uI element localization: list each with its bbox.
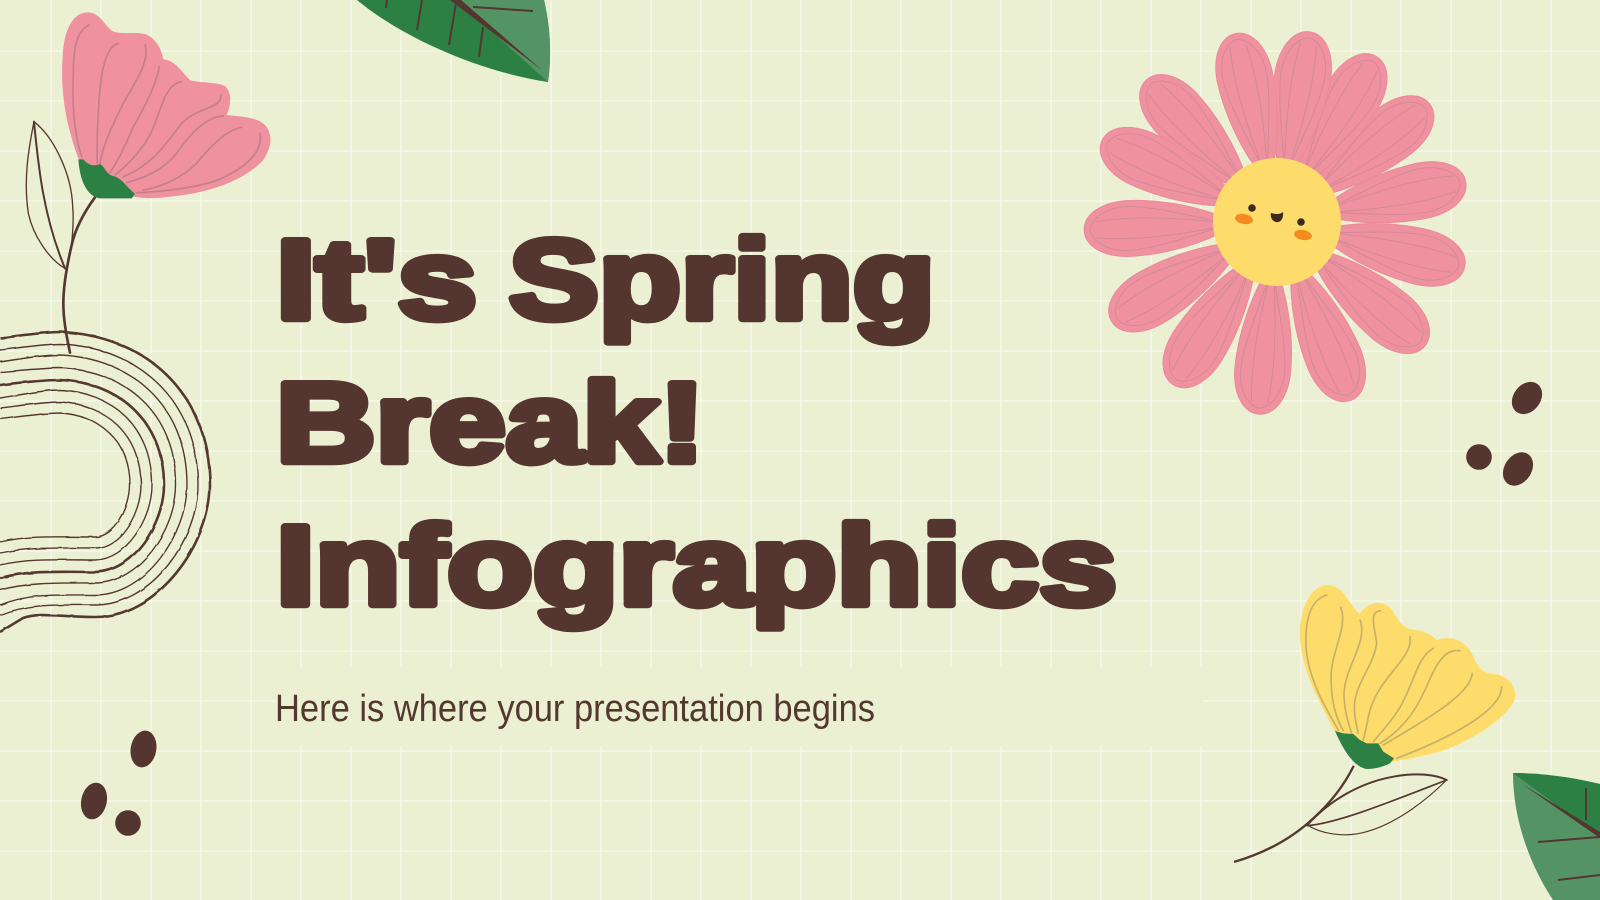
yellow petals [1300, 585, 1515, 762]
pink daisy with smiling face [1083, 27, 1472, 417]
bottom right leaf [1513, 773, 1600, 900]
stem [63, 197, 95, 353]
pink flower with stem and outlined leaf [26, 12, 270, 353]
yellow flower with stem and outlined leaf [1235, 585, 1515, 862]
face [1234, 204, 1313, 241]
title: Break! [276, 360, 705, 486]
outlined leaf [1307, 774, 1447, 835]
top leaf [357, 0, 550, 82]
outlined leaf [26, 122, 73, 268]
petal veins [73, 25, 260, 193]
petal veins [1306, 595, 1502, 758]
title: It's [276, 216, 477, 342]
title: Infographics [276, 502, 1117, 628]
line art: concentric arches [0, 332, 210, 632]
pink petals [62, 12, 270, 198]
dots top right [1466, 376, 1548, 491]
daisy petals [1083, 27, 1472, 417]
daisy centre [1213, 158, 1341, 286]
stem [1235, 767, 1353, 862]
subtitle: Here is where your presentation begins [275, 688, 875, 730]
green calyx [1335, 731, 1394, 769]
title [276, 216, 1117, 628]
title: Spring [509, 216, 935, 342]
green calyx [78, 159, 135, 198]
dots bottom left [78, 729, 159, 836]
